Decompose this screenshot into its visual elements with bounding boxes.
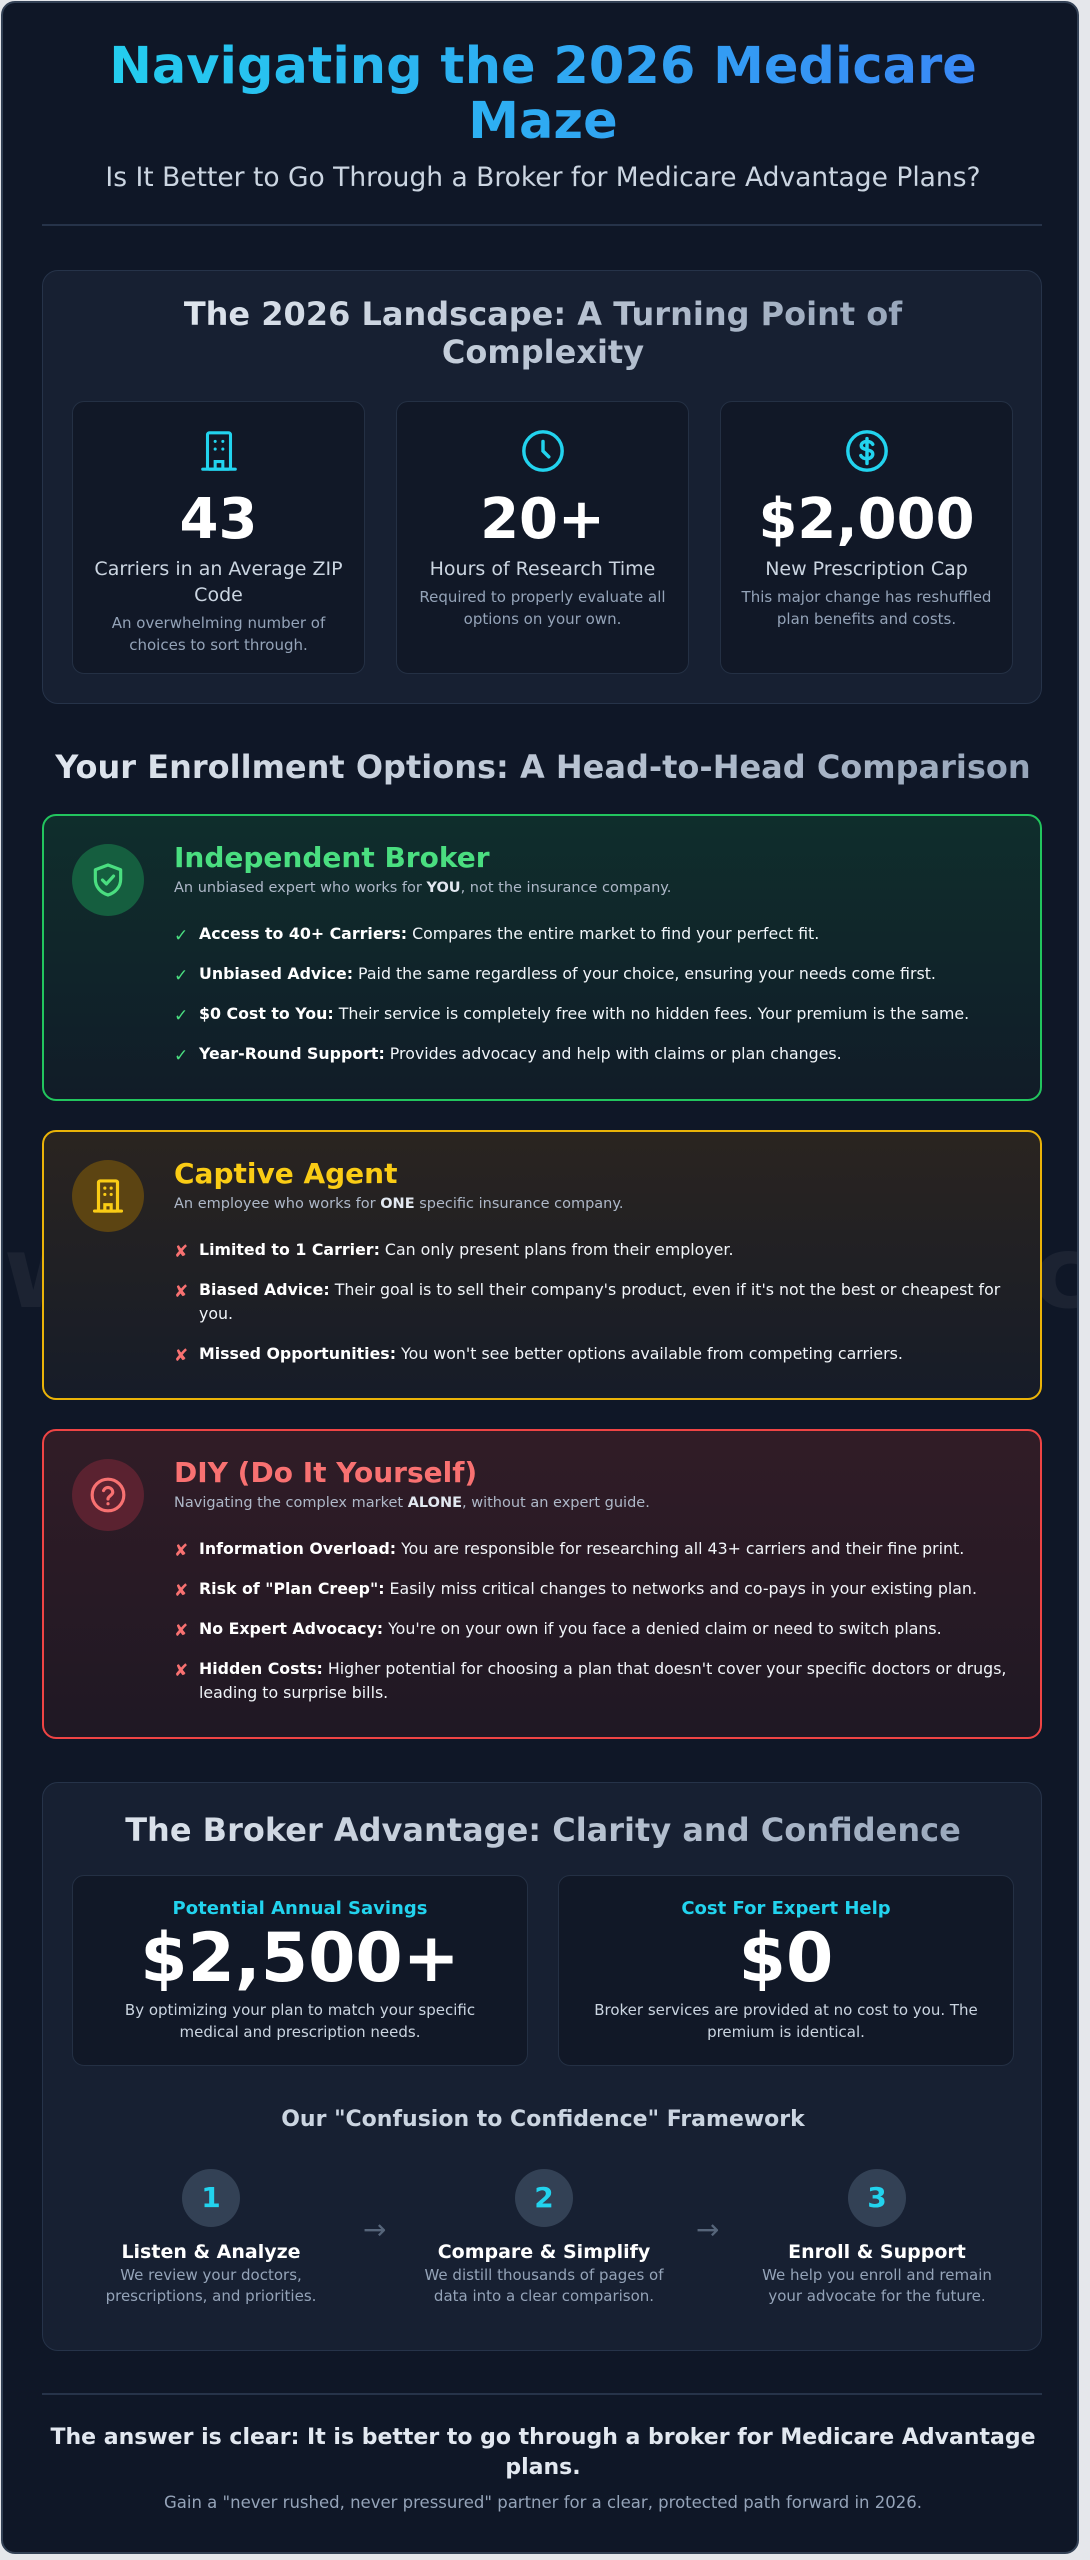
- card: captive agent: Captive Agent: [174, 1157, 397, 1190]
- card: DIY: Risk of "Plan Creep": Easily miss critical changes to networks and co-pays in your existing plan.: [199, 1579, 977, 1598]
- card: independent broker: $0 Cost to You: Their service is completely free with no hidden fees. Your premium is the same.: [199, 1004, 969, 1023]
- stat: 43 carriers: An overwhelming number of choices to sort through.: [112, 614, 325, 654]
- step 3: We help you enroll and remain: [762, 2266, 992, 2284]
- conclusion: The answer is clear: It is better to go through a broker for Medicare Advantage plans.: [50, 2425, 1035, 2480]
- conclusion: Gain a "never rushed, never pressured" partner for a clear, protected path forward in 2026.: [164, 2493, 922, 2512]
- stat: $2,000 cap: $2,000: [758, 487, 975, 552]
- card: DIY: ✘: [174, 1621, 188, 1641]
- card: captive agent: [42, 1130, 1042, 1400]
- step 2: We distill thousands of pages of: [424, 2266, 664, 2284]
- title: Maze: [468, 92, 618, 151]
- card: captive agent: ✘: [174, 1282, 188, 1302]
- card: independent broker: An unbiased expert who works for YOU, not the insurance company.: [174, 880, 671, 896]
- card: captive agent: An employee who works for ONE specific insurance company.: [174, 1196, 624, 1212]
- stat: $2,000 cap: [720, 401, 1013, 674]
- icon: dollar: [846, 430, 888, 472]
- step 1: Listen & Analyze: [121, 2241, 301, 2263]
- arrow: →: [363, 2213, 386, 2246]
- icon: building: [72, 1160, 144, 1232]
- card: DIY: Information Overload: You are responsible for researching all 43+ carriers and their fine print.: [199, 1539, 964, 1558]
- step 2: 2: [534, 2181, 554, 2214]
- card: captive agent: Limited to 1 Carrier: Can only present plans from their employer.: [199, 1240, 733, 1259]
- card: savings: [72, 1875, 528, 2066]
- card: savings: By optimizing your plan to match your specific medical and prescription needs.: [125, 2001, 475, 2041]
- card: cost: [558, 1875, 1014, 2066]
- card: independent broker: Unbiased Advice: Paid the same regardless of your choice, ensuring your needs come first.: [199, 964, 936, 983]
- card: independent broker: ✓: [174, 966, 188, 986]
- card: cost: Cost For Expert Help: [681, 1898, 891, 1919]
- step 1: 1: [201, 2181, 221, 2214]
- card: independent broker: ✓: [174, 1046, 188, 1066]
- icon: shield: [72, 844, 144, 916]
- section heading: enrollment options: Your Enrollment Options: A Head-to-Head Comparison: [55, 748, 1031, 786]
- card: DIY: No Expert Advocacy: You're on your own if you face a denied claim or need to switch plans.: [199, 1619, 942, 1638]
- stat: $2,000 cap: This major change has reshuffled plan benefits and costs.: [742, 588, 991, 628]
- stat: 43 carriers: Carriers in an Average ZIP Code: [94, 558, 343, 606]
- stat: $2,000 cap: New Prescription Cap: [765, 558, 968, 580]
- stat: 20+ hours: Hours of Research Time: [430, 558, 655, 580]
- card: independent broker: ✓: [174, 1006, 188, 1026]
- step 3: [762, 2169, 992, 2305]
- stat: 20+ hours: 20+: [480, 487, 605, 552]
- card: DIY: ✘: [174, 1541, 188, 1561]
- stat: 20+ hours: Required to properly evaluate all options on your own.: [419, 588, 666, 628]
- step 2: data into a clear comparison.: [434, 2287, 654, 2305]
- card: captive agent: Biased Advice: Their goal is to sell their company's product, even if it's not the best or cheapest for you.: [199, 1280, 1000, 1323]
- step 3: Enroll & Support: [788, 2241, 966, 2263]
- step 1: prescriptions, and priorities.: [106, 2287, 316, 2305]
- panel: broker advantage: [42, 1782, 1042, 2351]
- conclusion: [50, 2425, 1035, 2512]
- panel: 2026 landscape: [42, 270, 1042, 704]
- card: DIY: Hidden Costs: Higher potential for choosing a plan that doesn't cover your specific doctors or drugs, leading to surprise bills.: [199, 1659, 1006, 1702]
- card: independent broker: Independent Broker: [174, 841, 490, 874]
- card: independent broker: [42, 814, 1042, 1101]
- card: cost: $0: [739, 1919, 833, 1998]
- card: DIY: Navigating the complex market ALONE, without an expert guide.: [174, 1495, 650, 1511]
- step 3: 3: [867, 2181, 887, 2214]
- icon: question: [72, 1459, 144, 1531]
- card: DIY: ✘: [174, 1661, 188, 1681]
- card: DIY: ✘: [174, 1581, 188, 1601]
- subtitle: Is It Better to Go Through a Broker for Medicare Advantage Plans?: [105, 162, 981, 193]
- card: savings: Potential Annual Savings: [173, 1898, 427, 1919]
- arrow: →: [696, 2213, 719, 2246]
- stat: 43 carriers: [72, 401, 365, 674]
- step 1: [106, 2169, 316, 2305]
- card: captive agent: Missed Opportunities: You won't see better options available from competing carriers.: [199, 1344, 903, 1363]
- card: independent broker: Year-Round Support: Provides advocacy and help with claims or plan changes.: [199, 1044, 842, 1063]
- card: cost: Broker services are provided at no cost to you. The premium is identical.: [594, 2001, 978, 2041]
- step 3: your advocate for the future.: [768, 2287, 986, 2305]
- title: Navigating the 2026 Medicare: [109, 37, 977, 96]
- framework heading: Our "Confusion to Confidence" Framework: [281, 2107, 805, 2132]
- stat: 20+ hours: [396, 401, 689, 674]
- step 2: Compare & Simplify: [438, 2241, 650, 2263]
- step 1: We review your doctors,: [120, 2266, 302, 2284]
- advantage heading: The Broker Advantage: Clarity and Confidence: [125, 1811, 961, 1849]
- card: DIY: [42, 1429, 1042, 1739]
- stat: 43 carriers: 43: [180, 487, 257, 552]
- card: captive agent: ✘: [174, 1346, 188, 1366]
- title: [43, 39, 1043, 149]
- landscape heading: The 2026 Landscape: A Turning Point of Complexity: [184, 295, 902, 371]
- card: DIY: DIY (Do It Yourself): [174, 1456, 477, 1489]
- step 2: [424, 2169, 664, 2305]
- card: savings: $2,500+: [140, 1919, 460, 1998]
- card: independent broker: Access to 40+ Carriers: Compares the entire market to find your perfect fit.: [199, 924, 819, 943]
- icon: building: [201, 431, 237, 471]
- card: captive agent: ✘: [174, 1242, 188, 1262]
- icon: clock: [522, 430, 564, 472]
- card: independent broker: ✓: [174, 926, 188, 946]
